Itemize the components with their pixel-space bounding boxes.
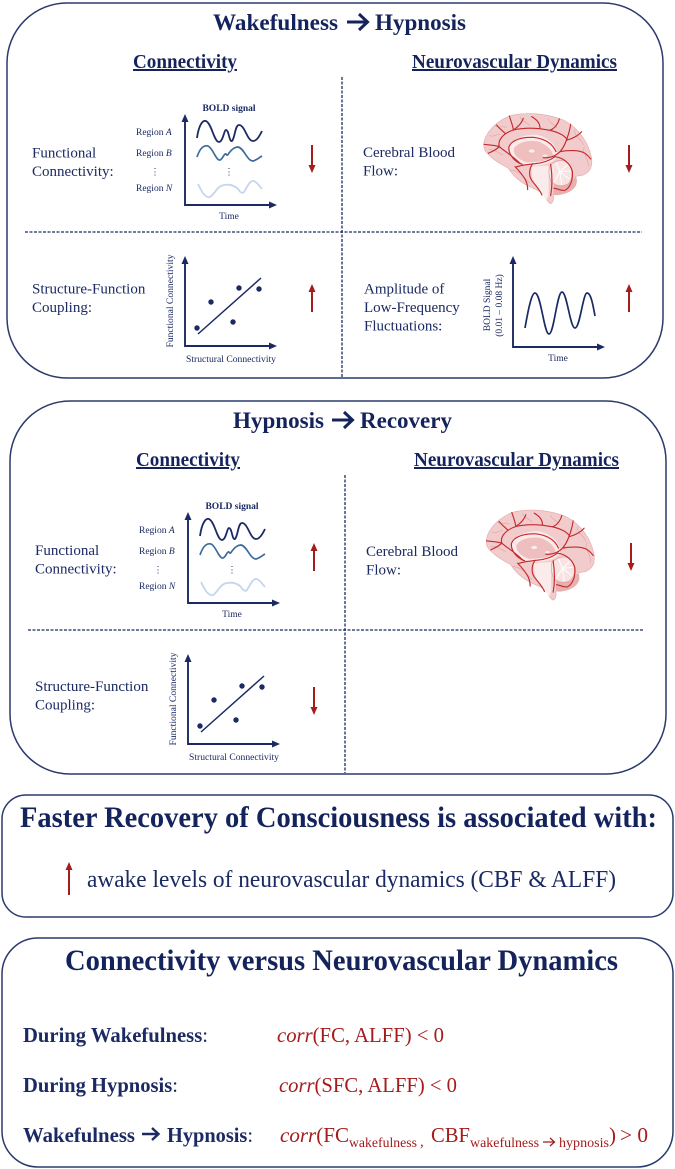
label: structure-function coupling: Structure-Function	[35, 679, 148, 695]
icon: brain with vessels	[486, 510, 594, 600]
icon: brain with vessels	[484, 114, 592, 204]
heading: faster recovery: Faster Recovery of Consciousness is associated with:	[20, 801, 657, 834]
text: awake levels: awake levels of neurovascular dynamics (CBF & ALFF)	[87, 867, 616, 893]
chart: structure-function scatter: Structural Connectivity	[186, 355, 276, 365]
chart: BOLD signal by region: Time	[219, 212, 239, 222]
row label: wakefulness to hypnosis: Wakefulness	[23, 1123, 135, 1147]
chart: low-frequency BOLD wave: BOLD Signal	[483, 278, 493, 331]
heading: connectivity: Connectivity	[133, 51, 237, 73]
formula: corr FC CBF change: corr(FC	[280, 1123, 349, 1147]
label: cerebral blood flow: Cerebral Blood	[363, 145, 455, 161]
formula: corr FC CBF change	[280, 1123, 648, 1151]
title: hypnosis to recovery: Recovery	[360, 408, 452, 434]
label: structure-function coupling: Coupling:	[35, 698, 95, 714]
chart: BOLD signal by region: Region B	[136, 149, 172, 159]
formula: corr FC CBF change: wakefulness	[349, 1136, 417, 1151]
chart: low-frequency BOLD wave	[483, 256, 605, 364]
chart: BOLD signal by region: Region B	[139, 547, 175, 557]
row label: wakefulness to hypnosis: Hypnosis:	[167, 1123, 253, 1147]
chart: BOLD signal by region	[136, 104, 277, 222]
heading: connectivity: Connectivity	[136, 449, 240, 471]
row label: wakefulness to hypnosis	[23, 1123, 253, 1147]
chart: low-frequency BOLD wave: (0.01 – 0.08 Hz)	[494, 274, 505, 337]
label: structure-function coupling: Coupling:	[32, 300, 92, 316]
chart: BOLD signal by region: ⋮	[224, 168, 234, 178]
label: amplitude of low-frequency fluctuations: Amplitude of	[364, 282, 444, 298]
heading: connectivity versus neurovascular dynamics: Connectivity versus Neurovascular Dynamics	[65, 944, 618, 977]
row label: during hypnosis: During Hypnosis:	[23, 1073, 178, 1097]
arrow: functional connectivity increases	[310, 543, 318, 571]
label: cerebral blood flow: Flow:	[366, 562, 401, 578]
formula: corr FC CBF change: hypnosis	[559, 1136, 609, 1151]
label: functional connectivity: Functional	[35, 543, 99, 559]
chart: structure-function scatter	[166, 254, 277, 365]
formula: corr SFC ALFF: corr(SFC, ALFF) < 0	[279, 1073, 457, 1097]
chart: BOLD signal by region: Region A	[139, 526, 175, 536]
label: functional connectivity: Functional	[32, 146, 96, 162]
label: functional connectivity: Connectivity:	[35, 562, 117, 578]
title: wakefulness to hypnosis: Wakefulness	[213, 10, 338, 36]
formula: corr FC CBF change: CBF	[431, 1123, 470, 1147]
panel: connectivity versus neurovascular dynamics	[2, 938, 673, 1167]
label: functional connectivity: Connectivity:	[32, 164, 114, 180]
heading: neurovascular dynamics: Neurovascular Dynamics	[414, 449, 619, 471]
chart: structure-function scatter	[169, 652, 280, 763]
arrow: coupling increases	[308, 284, 316, 312]
chart: BOLD signal by region: Time	[222, 610, 242, 620]
title: wakefulness to hypnosis: Hypnosis	[375, 10, 466, 36]
label: cerebral blood flow: Cerebral Blood	[366, 544, 458, 560]
chart: BOLD signal by region: BOLD signal	[202, 104, 256, 114]
chart: BOLD signal by region: ⋮	[153, 566, 163, 576]
heading: neurovascular dynamics: Neurovascular Dynamics	[412, 51, 617, 73]
arrow: cerebral blood flow decreases	[628, 543, 634, 571]
chart: BOLD signal by region: Region N	[139, 582, 176, 592]
formula: corr FC CBF change: )	[609, 1123, 616, 1147]
arrow: coupling decreases	[310, 687, 318, 715]
arrow: increased awake levels	[66, 862, 72, 895]
chart: BOLD signal by region	[139, 502, 280, 620]
formula: corr FC CBF change: ,	[420, 1134, 424, 1150]
chart: BOLD signal by region: Region N	[136, 184, 173, 194]
arrow: ALFF increases	[626, 284, 632, 312]
formula: corr FC CBF change: wakefulness	[470, 1136, 539, 1151]
chart: BOLD signal by region: ⋮	[227, 566, 237, 576]
title: hypnosis to recovery: Hypnosis	[233, 408, 324, 434]
arrow: functional connectivity decreases	[308, 145, 316, 173]
arrow: cerebral blood flow decreases	[626, 145, 632, 173]
panel: hypnosis to recovery	[10, 401, 666, 774]
panel: wakefulness to hypnosis	[7, 3, 663, 378]
title: hypnosis to recovery	[233, 408, 452, 434]
chart: structure-function scatter: Functional Connectivity	[169, 652, 179, 746]
title: wakefulness to hypnosis	[213, 10, 466, 36]
row label: during wakefulness: During Wakefulness:	[23, 1023, 208, 1047]
label: amplitude of low-frequency fluctuations: Fluctuations:	[364, 318, 442, 334]
chart: BOLD signal by region: Region A	[136, 128, 172, 138]
label: structure-function coupling: Structure-Function	[32, 282, 145, 298]
formula: corr FC ALFF: corr(FC, ALFF) < 0	[277, 1023, 444, 1047]
label: amplitude of low-frequency fluctuations: Low-Frequency	[364, 300, 460, 316]
chart: low-frequency BOLD wave: Time	[548, 354, 568, 364]
formula: corr FC CBF change: > 0	[620, 1123, 648, 1147]
label: cerebral blood flow: Flow:	[363, 164, 398, 180]
chart: BOLD signal by region: ⋮	[150, 168, 160, 178]
chart: structure-function scatter: Functional Connectivity	[166, 254, 176, 348]
chart: BOLD signal by region: BOLD signal	[205, 502, 259, 512]
panel: faster recovery of consciousness	[2, 795, 673, 917]
chart: structure-function scatter: Structural Connectivity	[189, 753, 279, 763]
